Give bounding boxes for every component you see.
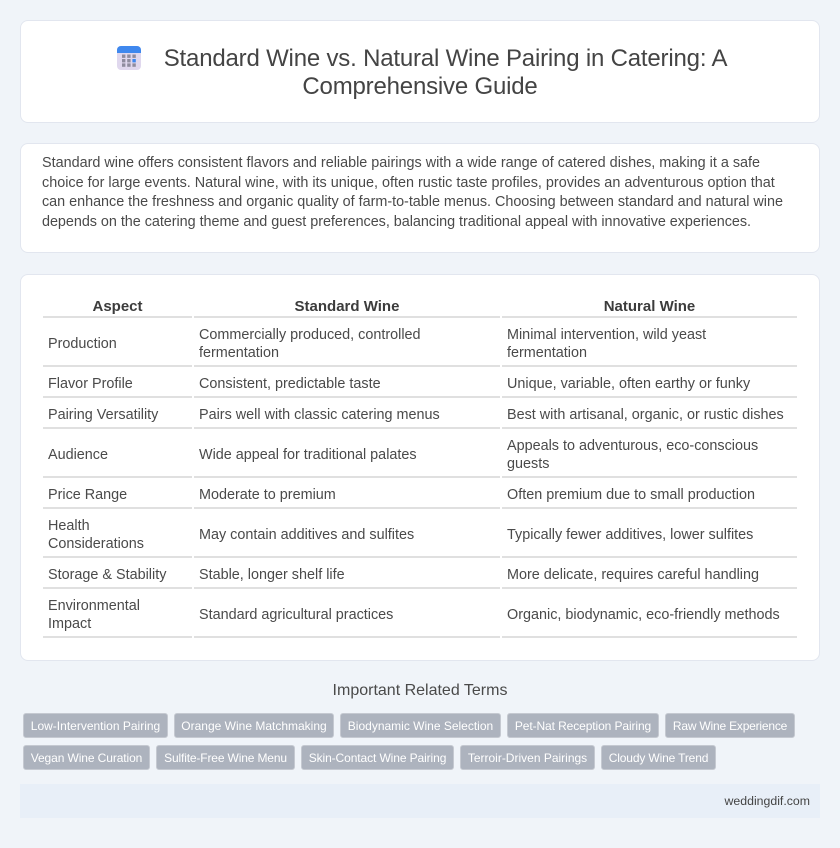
table header: Natural Wine [604, 298, 695, 315]
panel: introduction [20, 143, 820, 253]
comparison table: guests [507, 456, 549, 472]
related term tags: Vegan Wine Curation [31, 751, 142, 765]
comparison table: Health [48, 518, 90, 534]
table header: Standard Wine [295, 298, 399, 315]
comparison table: fermentation [199, 345, 279, 361]
text block: introduction: choice for large events. Natural wine, with its unique, often rustic taste profiles, provides an adventurous option that [42, 175, 775, 191]
text block: introduction: depends on the catering theme and guest preferences, balancing traditional appeal with innovative experiences. [42, 214, 751, 230]
comparison table [43, 298, 797, 638]
comparison table: Storage & Stability [48, 567, 166, 583]
related term tags: Terroir-Driven Pairings [468, 751, 587, 765]
panel: header [20, 20, 820, 123]
related term tags: Low-Intervention Pairing [31, 719, 160, 733]
table header: Aspect [92, 298, 143, 315]
comparison table: Appeals to adventurous, eco-conscious [507, 438, 758, 454]
comparison table: Stable, longer shelf life [199, 567, 345, 583]
comparison table: Unique, variable, often earthy or funky [507, 376, 750, 392]
comparison table: Organic, biodynamic, eco-friendly methods [507, 607, 780, 623]
icon: calendar [117, 46, 141, 70]
comparison table: Consistent, predictable taste [199, 376, 381, 392]
related term tags: Cloudy Wine Trend [609, 751, 708, 765]
comparison table: Typically fewer additives, lower sulfites [507, 527, 753, 543]
related term tags [23, 713, 795, 770]
comparison table: Impact [48, 616, 91, 632]
footer credit: weddingdif.com [725, 794, 810, 808]
comparison table: Audience [48, 447, 108, 463]
text block: introduction: Standard wine offers consistent flavors and reliable pairings with a wide range of catered dishes, making it a safe [42, 155, 760, 171]
comparison table: Wide appeal for traditional palates [199, 447, 417, 463]
comparison table: Price Range [48, 487, 127, 503]
related term tags: Biodynamic Wine Selection [348, 719, 493, 733]
table header [92, 298, 695, 315]
comparison table: Considerations [48, 536, 144, 552]
title: Comprehensive Guide [302, 73, 538, 100]
comparison table: Production [48, 336, 117, 352]
comparison table: May contain additives and sulfites [199, 527, 414, 543]
comparison table: Pairing Versatility [48, 407, 158, 423]
comparison table: Pairs well with classic catering menus [199, 407, 440, 423]
comparison table: Best with artisanal, organic, or rustic dishes [507, 407, 784, 423]
text block: introduction: can enhance the freshness and organic quality of farm-to-table menus. Choosing between standard and natural wine [42, 194, 783, 210]
related term tags: Raw Wine Experience [673, 719, 787, 733]
text block: introduction [42, 155, 783, 230]
related term tags: Orange Wine Matchmaking [181, 719, 327, 733]
comparison table: Standard agricultural practices [199, 607, 393, 623]
comparison table: Often premium due to small production [507, 487, 755, 503]
comparison table: fermentation [507, 345, 587, 361]
comparison table: Minimal intervention, wild yeast [507, 327, 706, 343]
title: Standard Wine vs. Natural Wine Pairing in Catering: A [164, 45, 727, 72]
comparison table: Flavor Profile [48, 376, 133, 392]
related term tags: Skin-Contact Wine Pairing [309, 751, 446, 765]
heading: related terms: Important Related Terms [333, 682, 507, 699]
comparison table: Environmental [48, 598, 140, 614]
comparison table: More delicate, requires careful handling [507, 567, 759, 583]
related term tags: Pet-Nat Reception Pairing [515, 719, 651, 733]
title [164, 45, 728, 100]
comparison table: Commercially produced, controlled [199, 327, 421, 343]
footer bar [20, 784, 820, 818]
related term tags: Sulfite-Free Wine Menu [164, 751, 287, 765]
panel: comparison table [20, 274, 820, 661]
comparison table: Moderate to premium [199, 487, 336, 503]
